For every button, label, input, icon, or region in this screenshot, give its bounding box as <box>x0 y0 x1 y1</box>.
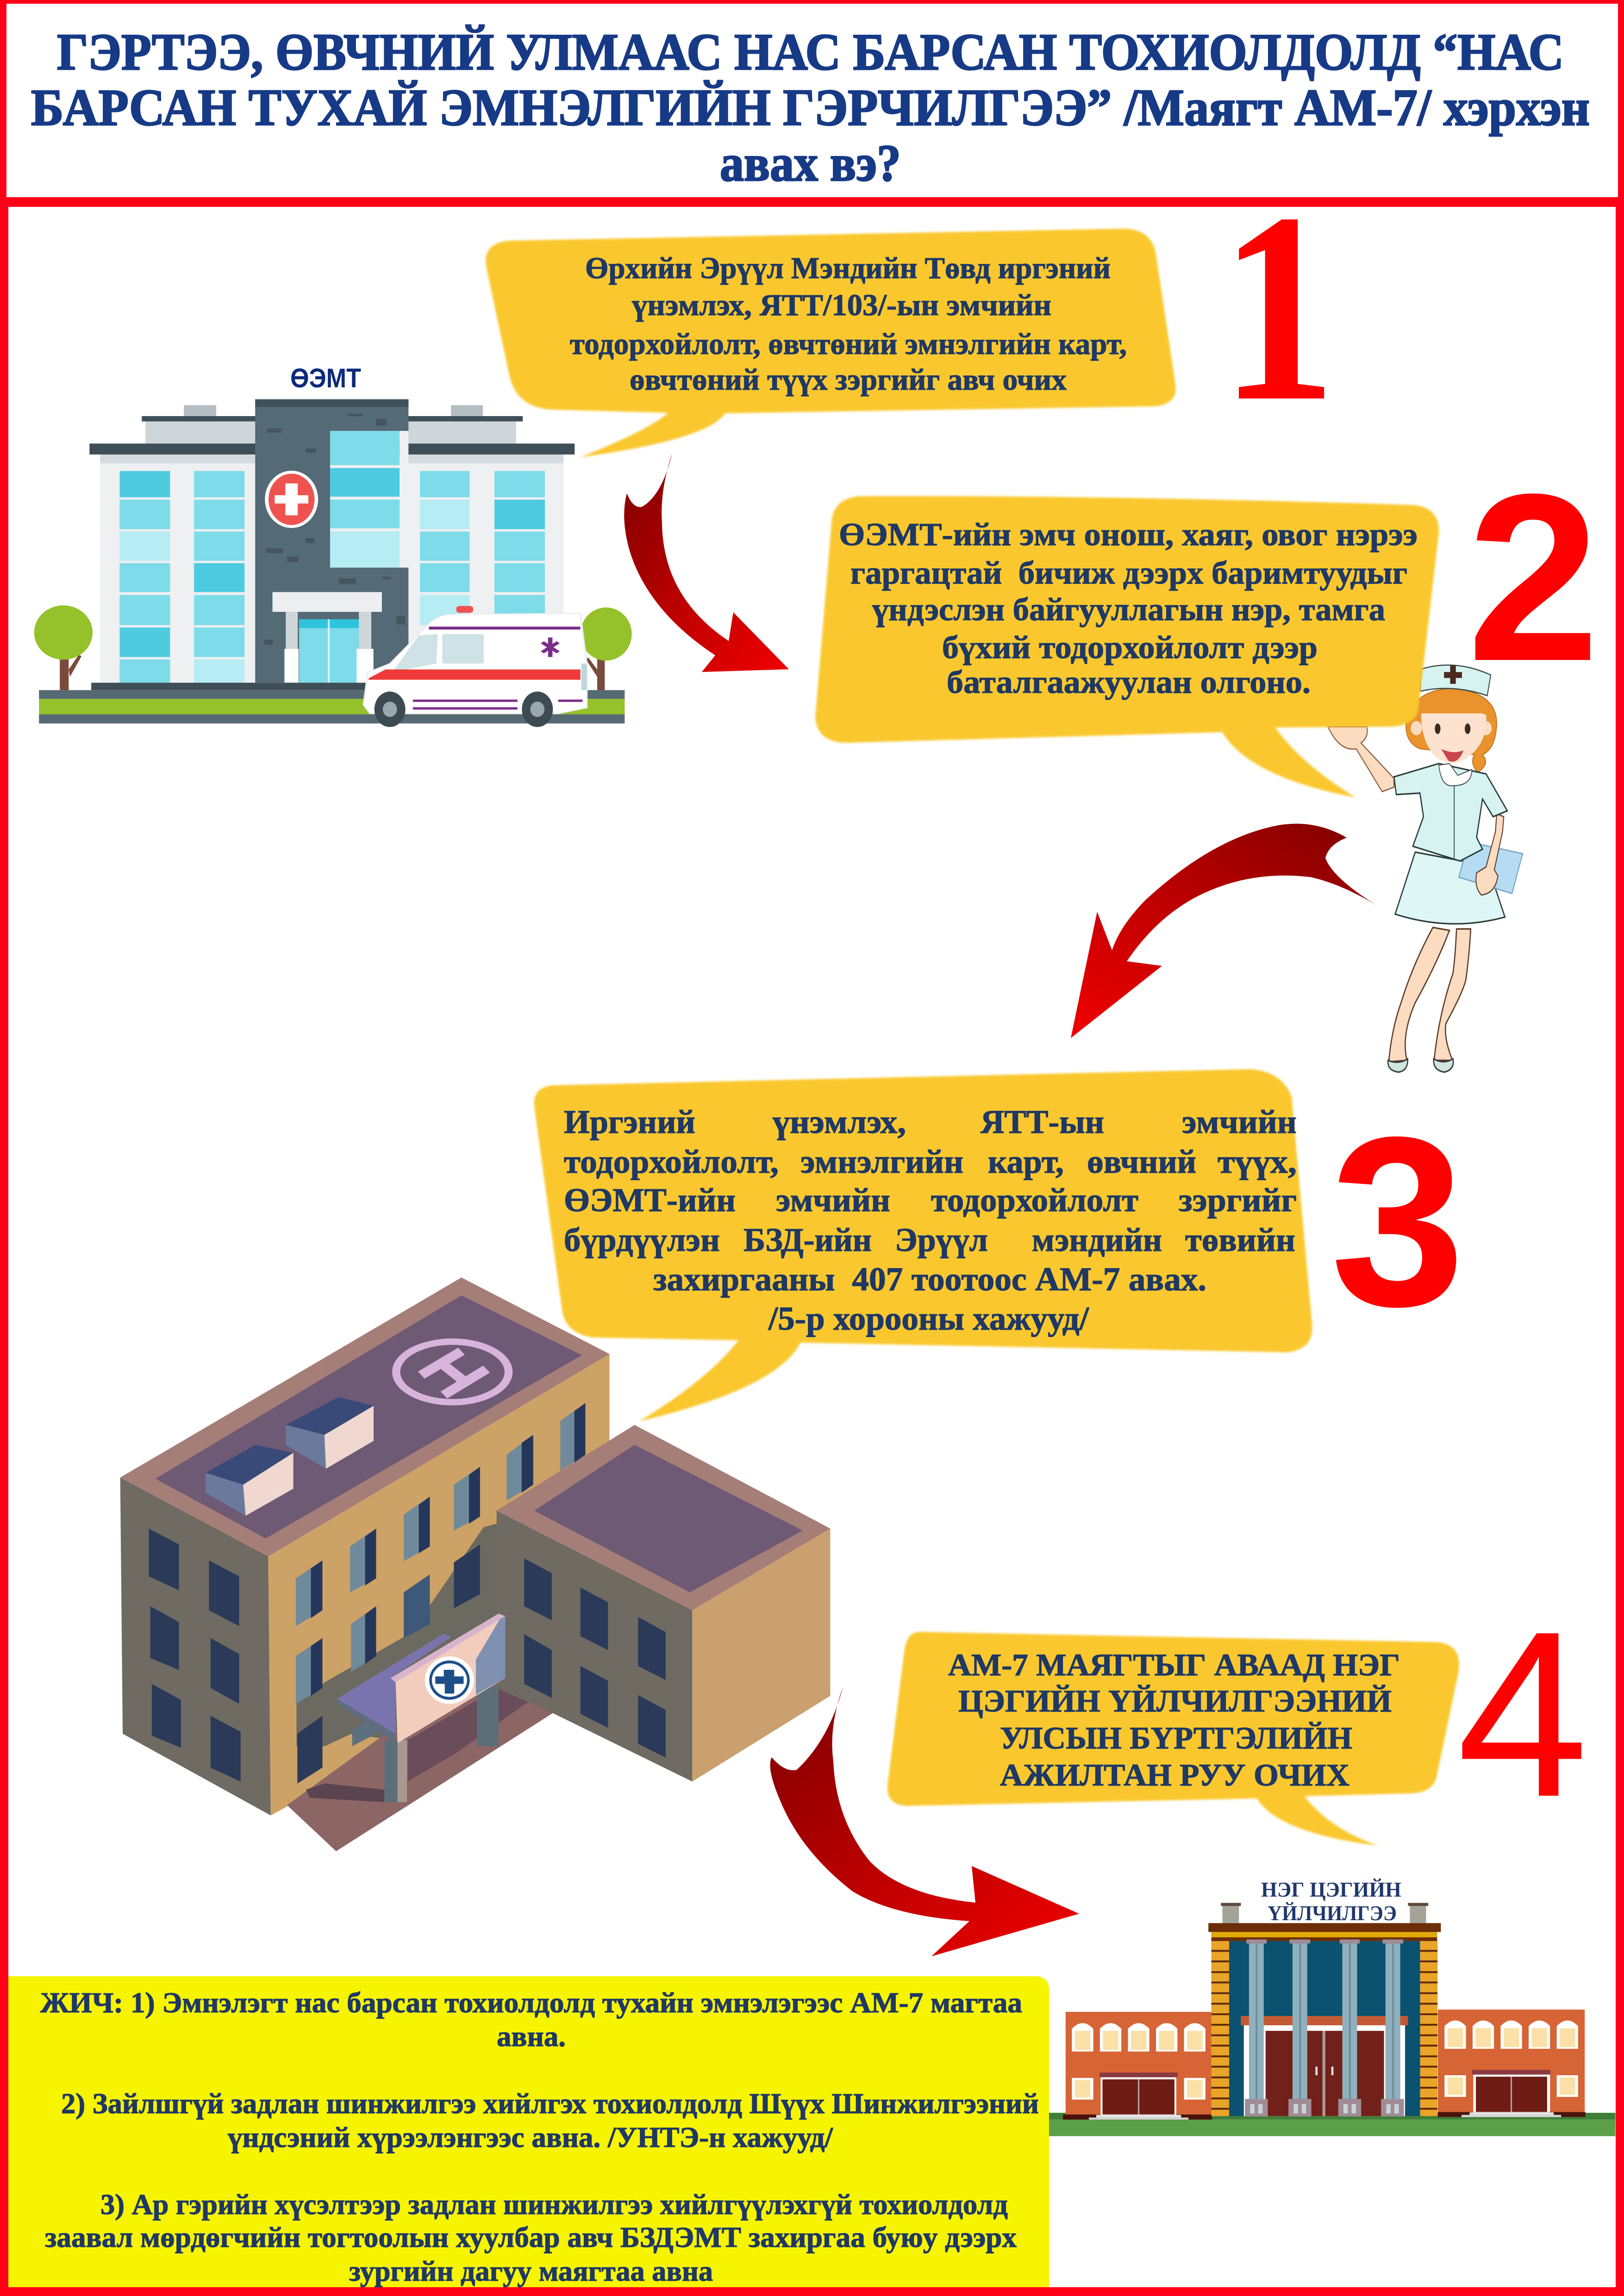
helipad <box>396 1342 509 1402</box>
step 3 text: захиргааны 407 тоотоос АМ-7 авах. <box>653 1261 1206 1298</box>
step 3 text: бүрдүүлэн <box>564 1221 720 1258</box>
step 3 text: зэргийг <box>1179 1182 1297 1219</box>
wall shadow and forecourt <box>287 1523 554 1851</box>
roof cornice <box>1208 1923 1441 1941</box>
nurse fringe <box>1419 691 1490 716</box>
note text: 2) Зайлшгүй задлан шинжилгээ хийлгэх тохиолдолд Шүүх Шинжилгээний <box>61 2088 1039 2120</box>
entrance canopy <box>334 1614 505 1802</box>
step 3 text: төвийн <box>1185 1221 1295 1258</box>
note text: 3) Ар гэрийн хүсэлтээр задлан шинжилгээ хийлгүүлэхгүй тохиолдолд <box>100 2189 1008 2221</box>
left wall windows <box>149 1529 241 1781</box>
step 1 text: Өрхийн Эрүүл Мэндийн Төвд иргэний <box>585 251 1111 285</box>
nurse skirt <box>1395 852 1505 924</box>
chimneys <box>1221 1903 1428 1923</box>
number 3: 3 <box>1330 1086 1465 1356</box>
step 3 text: /5-р хорооны хажууд/ <box>768 1300 1089 1337</box>
number 2: 2 <box>1467 445 1599 711</box>
nurse hair <box>1406 688 1497 772</box>
building sign label: ҮЙЛЧИЛГЭЭ <box>1268 1901 1397 1925</box>
step 2 text: ӨЭМТ-ийн эмч онош, хаяг, овог нэрээ <box>839 517 1418 553</box>
step 2 speech bubble <box>815 496 1439 797</box>
step 3 text: үнэмлэх, <box>773 1103 906 1140</box>
central hall <box>1229 1941 1420 2116</box>
step 4 text: АМ-7 МАЯГТЫГ АВААД НЭГ <box>948 1647 1400 1682</box>
icon: trees <box>34 605 632 690</box>
left wing <box>1063 2012 1212 2120</box>
step 4 text: ЦЭГИЙН ҮЙЛЧИЛГЭЭНИЙ <box>958 1683 1392 1718</box>
nurse legs <box>1389 927 1471 1062</box>
note text: ЖИЧ: 1) Эмнэлэгт нас барсан тохиолдолд тухайн эмнэлэгээс АМ-7 магтаа <box>40 1987 1022 2019</box>
step 3 text: эмнэлгийн <box>800 1143 963 1180</box>
columns <box>1245 1940 1404 2116</box>
nurse raised arm <box>1328 727 1394 791</box>
main left wall <box>120 1477 271 1816</box>
main roof <box>120 1277 610 1556</box>
step 1 text: өвчтөний түүх зэргийг авч очих <box>630 363 1067 397</box>
step 3 text: мэндийн <box>1032 1221 1162 1258</box>
step 3 text: БЗД-ийн <box>743 1221 872 1258</box>
step 3 text: түүх, <box>1218 1143 1297 1180</box>
illustration: one-stop service building <box>1049 1878 1615 2136</box>
step 3 text: тодорхойлолт <box>931 1182 1138 1219</box>
icon: ambulance <box>363 606 587 727</box>
step 3 speech bubble <box>534 1069 1312 1421</box>
title: авах вэ? <box>720 135 901 192</box>
step 3 text: тодорхойлолт, <box>564 1143 779 1180</box>
note text: авна. <box>497 2021 566 2053</box>
step 3 text: Иргэний <box>564 1103 695 1140</box>
hospital sign label: ӨЭМТ <box>290 363 361 393</box>
step 1 text <box>570 251 1127 397</box>
right wall windows <box>296 1403 585 1784</box>
entrance logo <box>425 1656 474 1704</box>
wing windows <box>524 1558 666 1758</box>
note panel <box>8 1976 1049 2287</box>
arrow: step 1 to step 2 <box>624 453 789 672</box>
step 3 text: өвчний <box>1087 1143 1196 1180</box>
step 4 text <box>948 1647 1400 1792</box>
illustration: nurse <box>1328 665 1523 1072</box>
illustration: ӨЭМТ hospital with ambulance <box>34 363 632 727</box>
building sign label <box>1261 1878 1401 1925</box>
wing roof <box>497 1425 830 1610</box>
title <box>31 24 1590 192</box>
note text <box>40 1987 1039 2287</box>
step 3 text: ЯТТ-ын <box>981 1103 1104 1140</box>
note text: үндсэний хүрээлэнгээс авна. /УНТЭ-н хажууд/ <box>228 2122 833 2153</box>
step 3 text: эмчийн <box>776 1182 890 1219</box>
step 4 speech bubble <box>887 1632 1459 1846</box>
step 1 text: үнэмлэх, ЯТТ/103/-ын эмчийн <box>632 288 1051 322</box>
note text: заавал мөрдөгчийн тогтоолын хуулбар авч БЗДЭМТ захиргаа буюу дээрх <box>45 2222 1017 2253</box>
step 3 text: ӨЭМТ-ийн <box>564 1182 736 1219</box>
nurse arm and hand <box>1476 814 1504 895</box>
step 2 text: бүхий тодорхойлолт дээр <box>942 630 1318 666</box>
step 2 text: гаргацтай бичиж дээрх баримтуудыг <box>850 555 1407 591</box>
nurse face <box>1411 713 1492 763</box>
step 3 text: карт, <box>988 1143 1064 1180</box>
step 2 text: баталгаажуулан олгоно. <box>947 665 1311 700</box>
step 3 text: Эрүүл <box>895 1221 988 1258</box>
main right wall <box>268 1354 610 1816</box>
title: ГЭРТЭЭ, ӨВЧНИЙ УЛМААС НАС БАРСАН ТОХИОЛДОЛД “НАС <box>57 24 1564 81</box>
note text: зургийн дагуу маягтаа авна <box>349 2256 713 2287</box>
title: БАРСАН ТУХАЙ ЭМНЭЛГИЙН ГЭРЧИЛГЭЭ” /Маягт АМ-7/ хэрхэн <box>31 79 1590 137</box>
step 4 text: УЛСЫН БҮРТГЭЛИЙН <box>1000 1720 1352 1755</box>
step 3 text <box>564 1103 1297 1337</box>
nurse shirt <box>1394 764 1507 861</box>
nurse clipboard <box>1459 842 1523 894</box>
step 2 text: үндэслэн байгууллагын нэр, тамга <box>872 592 1385 628</box>
step 1 speech bubble <box>486 229 1176 457</box>
step 4 text: АЖИЛТАН РУУ ОЧИХ <box>1000 1757 1349 1792</box>
number 4: 4 <box>1457 1582 1588 1846</box>
step 2 text <box>839 517 1418 700</box>
ground <box>1049 2113 1615 2136</box>
right wing <box>1438 2010 1586 2117</box>
arrow: step 4 to one-stop service <box>770 1687 1079 1956</box>
icon: red cross sign <box>265 471 318 528</box>
wing walls <box>497 1511 830 1781</box>
nurse cap <box>1420 665 1491 696</box>
step 3 text: эмчийн <box>1182 1103 1297 1140</box>
number 1: 1 <box>1220 157 1336 457</box>
arrow: step 2 to step 3 <box>1071 824 1382 1038</box>
illustration: isometric health department building <box>120 1277 830 1851</box>
nurse collar <box>1439 764 1472 786</box>
building sign label: НЭГ ЦЭГИЙН <box>1261 1878 1401 1901</box>
step 1 text: тодорхойлолт, өвчтөний эмнэлгийн карт, <box>570 327 1127 361</box>
side pilasters <box>1212 1941 1437 2116</box>
nurse shoes <box>1388 1059 1453 1072</box>
rooftop units <box>206 1397 374 1516</box>
